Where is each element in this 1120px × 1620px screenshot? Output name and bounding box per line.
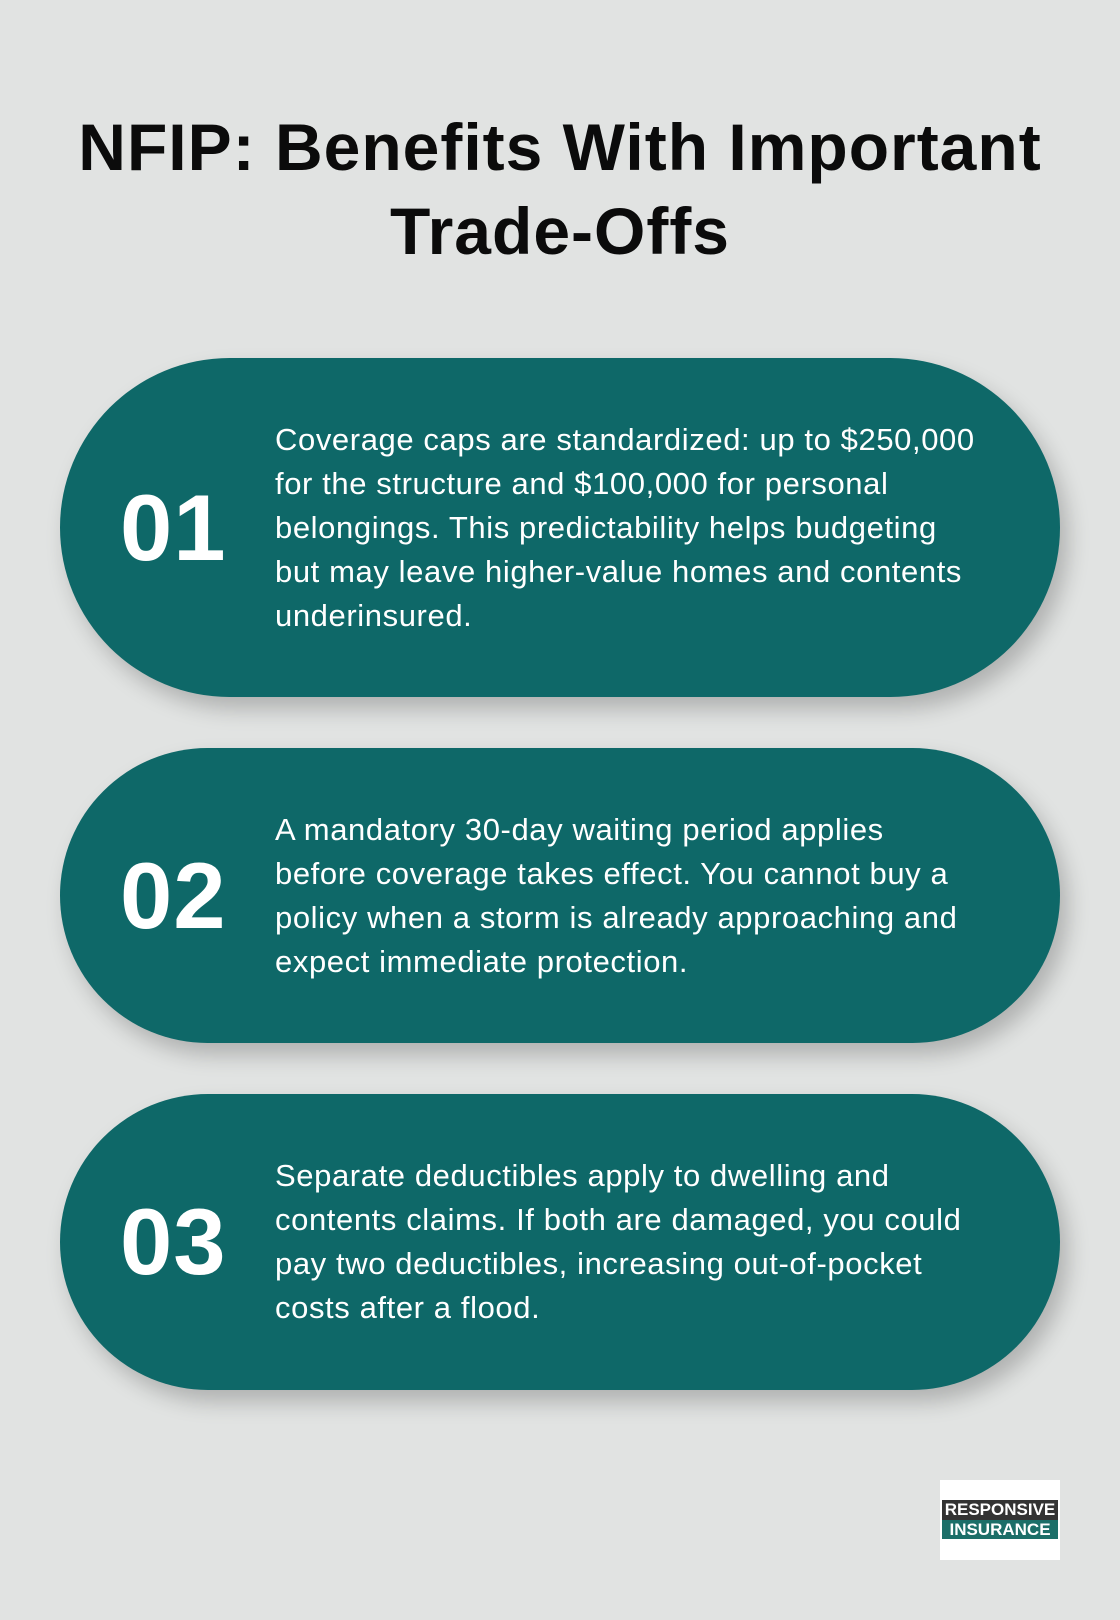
logo: RESPONSIVE bbox=[945, 1500, 1055, 1519]
text 03: costs after a flood. bbox=[275, 1290, 540, 1325]
text 01 bbox=[275, 422, 975, 632]
number 03: 03 bbox=[120, 1189, 227, 1294]
number 02: 02 bbox=[120, 842, 227, 948]
title: NFIP: Benefits With Important bbox=[78, 110, 1042, 184]
title: Trade-Offs bbox=[390, 194, 730, 268]
logo: INSURANCE bbox=[949, 1520, 1051, 1539]
text 01: Coverage caps are standardized: up to $250,000 bbox=[275, 422, 975, 456]
text 01: but may leave higher-value homes and contents bbox=[275, 554, 962, 588]
panel: item 01 bbox=[60, 358, 1060, 697]
title bbox=[78, 110, 1042, 268]
text 02: before coverage takes effect. You cannot buy a bbox=[275, 856, 948, 890]
text 03 bbox=[275, 1158, 961, 1325]
text 01: underinsured. bbox=[275, 598, 472, 632]
panel: item 02 bbox=[60, 748, 1060, 1043]
number 01: 01 bbox=[120, 474, 227, 580]
text 02 bbox=[275, 812, 957, 978]
text 03: pay two deductibles, increasing out-of-pocket bbox=[275, 1246, 922, 1281]
text 02: policy when a storm is already approaching and bbox=[275, 900, 957, 934]
logo bbox=[940, 1480, 1060, 1560]
text 02: A mandatory 30-day waiting period applies bbox=[275, 812, 884, 846]
text 02: expect immediate protection. bbox=[275, 944, 688, 978]
text 03: contents claims. If both are damaged, you could bbox=[275, 1202, 961, 1237]
text 01: belongings. This predictability helps budgeting bbox=[275, 510, 937, 544]
text 01: for the structure and $100,000 for personal bbox=[275, 466, 888, 500]
text 03: Separate deductibles apply to dwelling and bbox=[275, 1158, 890, 1193]
panel: item 03 bbox=[60, 1094, 1060, 1390]
